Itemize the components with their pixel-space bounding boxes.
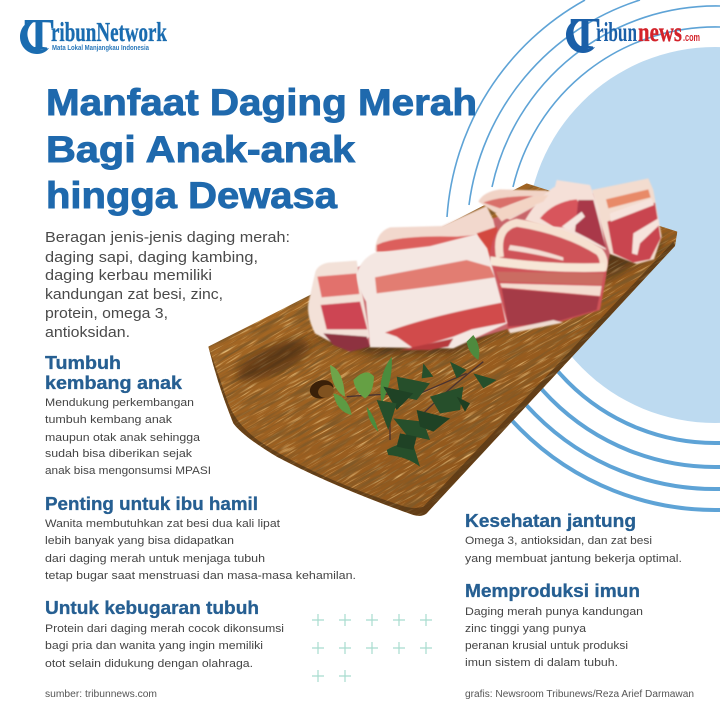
wooden board xyxy=(208,183,678,516)
section: Memproduksi imun: peranan krusial untuk produksi xyxy=(465,640,628,652)
title: Manfaat Daging Merah xyxy=(46,82,477,123)
section: Kesehatan jantung: Omega 3, antioksidan, dan zat besi xyxy=(465,535,652,547)
logo: Tribun Network: ribunNetwork xyxy=(51,17,167,47)
section: Tumbuh kembang anak xyxy=(45,353,211,477)
section: Penting untuk ibu hamil: Wanita membutuhkan zat besi dua kali lipat xyxy=(45,518,280,530)
large front slice xyxy=(357,234,507,350)
section: Untuk kebugaran tubuh: otot selain didukung dengan olahraga. xyxy=(45,658,253,670)
title: hingga Dewasa xyxy=(46,175,337,216)
intro text xyxy=(45,229,290,341)
logo: Tribunnews.com: ribun xyxy=(596,17,637,47)
section: Untuk kebugaran tubuh: Protein dari daging merah cocok dikonsumsi xyxy=(45,623,284,635)
section: Tumbuh kembang anak: sudah bisa diberikan sejak xyxy=(45,448,193,460)
section: Untuk kebugaran tubuh: Untuk kebugaran tubuh xyxy=(45,598,259,618)
logo: Tribunnews.com: T xyxy=(570,9,600,58)
meat base xyxy=(312,190,658,345)
source credit: sumber: tribunnews.com xyxy=(45,689,157,700)
section: Penting untuk ibu hamil: dari daging merah untuk menjaga tubuh xyxy=(45,553,265,565)
section: Tumbuh kembang anak: Tumbuh xyxy=(45,353,121,373)
right back slice xyxy=(592,178,662,264)
intro text: daging kerbau memiliki xyxy=(45,267,212,284)
section: Memproduksi imun: Memproduksi imun xyxy=(465,581,640,601)
section: Kesehatan jantung: yang membuat jantung bekerja optimal. xyxy=(465,553,682,565)
left front slice xyxy=(308,261,370,352)
illustration: meat on wooden board xyxy=(208,178,678,516)
section: Untuk kebugaran tubuh xyxy=(45,598,284,670)
decorative circle with concentric arcs xyxy=(440,0,720,510)
logo: Tribunnews.com: news xyxy=(638,17,682,47)
logo: Tribunnews.com: .com xyxy=(683,32,700,44)
intro text: daging sapi, daging kambing, xyxy=(45,249,258,266)
intro text: antioksidan. xyxy=(45,324,130,341)
section: Memproduksi imun: imun sistem di dalam tubuh. xyxy=(465,657,618,669)
section: Memproduksi imun: zinc tinggi yang punya xyxy=(465,623,587,635)
left back strip xyxy=(375,206,503,257)
section: Tumbuh kembang anak: tumbuh kembang anak xyxy=(45,414,173,426)
title xyxy=(46,82,477,216)
intro text: Beragan jenis-jenis daging merah: xyxy=(45,229,290,246)
section: Memproduksi imun: Daging merah punya kandungan xyxy=(465,606,643,618)
logo: Tribunnews.com xyxy=(566,9,700,58)
section: Kesehatan jantung xyxy=(465,511,682,565)
shadow under meat xyxy=(313,220,663,355)
section: Tumbuh kembang anak: anak bisa mengonsumsi MPASI xyxy=(45,465,211,477)
graphic credit: grafis: Newsroom Tribunews/Reza Arief Darmawan xyxy=(465,689,694,700)
logo: Tribun Network xyxy=(20,10,167,59)
back meat strip xyxy=(478,189,553,220)
decorative plus grid xyxy=(312,614,432,682)
section: Penting untuk ibu hamil: Penting untuk ibu hamil xyxy=(45,494,258,514)
title: Bagi Anak-anak xyxy=(46,129,355,170)
section: Penting untuk ibu hamil xyxy=(45,494,356,582)
logo: Tribun Network: Mata Lokal Manjangkau Indonesia xyxy=(52,45,149,52)
curled ring slice xyxy=(489,219,607,333)
intro text: kandungan zat besi, zinc, xyxy=(45,286,223,303)
section: Memproduksi imun xyxy=(465,581,643,669)
section: Penting untuk ibu hamil: tetap bugar saat menstruasi dan masa-masa kehamilan. xyxy=(45,570,356,582)
logo: Tribun Network: T xyxy=(24,10,54,59)
middle back slice xyxy=(495,180,606,250)
section: Penting untuk ibu hamil: lebih banyak yang bisa didapatkan xyxy=(45,535,234,547)
section: Tumbuh kembang anak: kembang anak xyxy=(45,373,183,393)
section: Tumbuh kembang anak: Mendukung perkembangan xyxy=(45,397,194,409)
section: Untuk kebugaran tubuh: bagi pria dan wanita yang ingin memiliki xyxy=(45,640,263,652)
herb sprig xyxy=(330,335,497,467)
intro text: protein, omega 3, xyxy=(45,305,168,322)
section: Tumbuh kembang anak: maupun otak anak sehingga xyxy=(45,432,201,444)
section: Kesehatan jantung: Kesehatan jantung xyxy=(465,511,636,531)
